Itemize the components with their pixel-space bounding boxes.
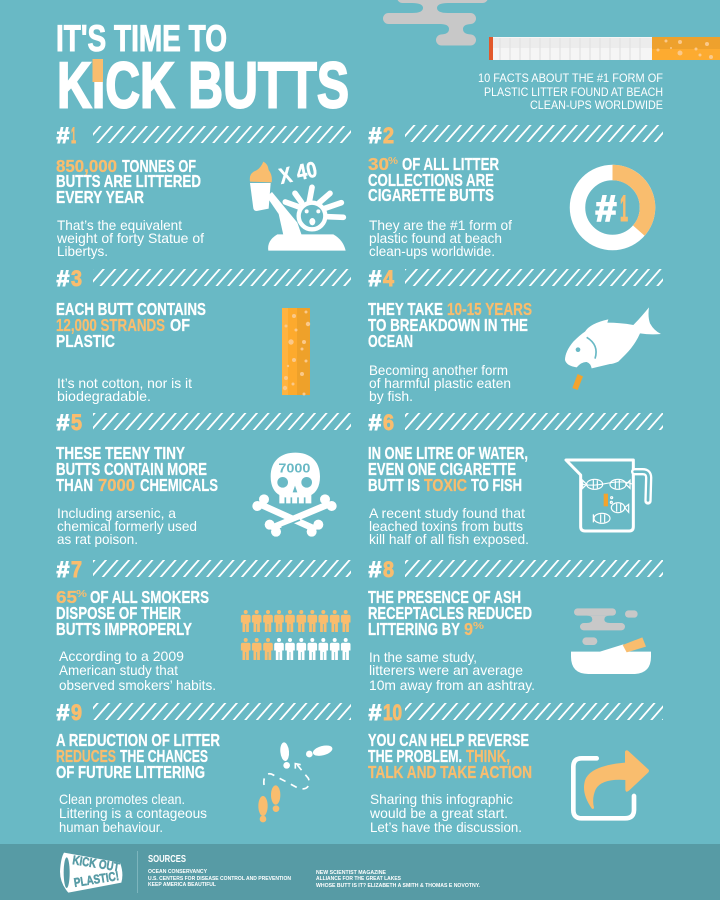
- body 7: According to a 2009: [59, 648, 184, 664]
- panel: fact 4: [368, 266, 663, 404]
- heading 5: THESE TEENY TINY: [56, 443, 185, 463]
- heading 1: EVERY YEAR: [56, 187, 144, 207]
- heading 3: 12,000 STRANDS: [56, 315, 165, 335]
- title: IT'S TIME TO: [56, 18, 227, 59]
- logo: kick out plastic: [60, 853, 122, 893]
- body 4: by fish.: [369, 388, 413, 404]
- body 6: [369, 505, 529, 547]
- label: times forty: X 40: [277, 157, 319, 189]
- body 2: plastic found at beach: [369, 230, 502, 246]
- heading 9: OF FUTURE LITTERING: [56, 762, 205, 782]
- body 5: as rat poison.: [57, 531, 138, 547]
- heading 6: EVEN ONE CIGARETTE: [368, 459, 516, 479]
- number 6: #: [368, 410, 382, 435]
- body 6: kill half of all fish exposed.: [369, 531, 529, 547]
- subtitle: [478, 71, 663, 112]
- heading 3: [56, 299, 206, 351]
- sources: WHOSE BUTT IS IT? ELIZABETH A SMITH & THOMAS E NOVOTNY.: [316, 883, 480, 889]
- heading 1: [56, 156, 201, 207]
- panel: fact 6: [368, 410, 663, 547]
- heading 8: RECEPTACLES REDUCED: [368, 603, 532, 623]
- body 7: observed smokers’ habits.: [59, 677, 216, 693]
- heading 1: 850,000: [56, 156, 117, 176]
- body 1: That’s the equivalent: [57, 217, 182, 233]
- heading 10: THE PROBLEM.: [368, 746, 462, 766]
- heading 1: TONNES OF: [122, 156, 196, 176]
- icon: share arrow: [573, 750, 649, 818]
- heading 6: TOXIC: [424, 475, 467, 495]
- heading 7: DISPOSE OF THEIR: [56, 603, 181, 623]
- number 6: [368, 410, 394, 435]
- heading 10: TALK AND TAKE ACTION: [368, 762, 532, 782]
- heading 3: OF: [170, 315, 190, 335]
- heading 2: COLLECTIONS ARE: [368, 170, 494, 190]
- number 4: #: [368, 266, 382, 291]
- heading 8: LITTERING BY: [368, 619, 460, 639]
- heading 4: 10-15 YEARS: [447, 299, 532, 319]
- body 7: [59, 648, 216, 693]
- body 1: Libertys.: [57, 243, 108, 259]
- subtitle: 10 FACTS ABOUT THE #1 FORM OF: [478, 71, 663, 85]
- heading 4: OCEAN: [368, 331, 413, 351]
- body 5: [57, 505, 197, 547]
- heading 10: [368, 730, 532, 782]
- body 8: [369, 649, 535, 693]
- heading 10: THINK,: [466, 746, 510, 766]
- sources: NEW SCIENTIST MAGAZINE: [316, 870, 386, 876]
- number 2: [368, 123, 394, 148]
- icon: skull and crossbones: [252, 453, 337, 537]
- body 3: [57, 375, 192, 404]
- cigarette: [489, 37, 720, 60]
- body 5: chemical formerly used: [57, 518, 197, 534]
- heading 4: THEY TAKE: [368, 299, 443, 319]
- number 3: [56, 266, 82, 291]
- footer band: [0, 844, 720, 900]
- heading 6: BUTT IS: [368, 475, 420, 495]
- panel: fact 1: [56, 123, 351, 259]
- body 2: [369, 217, 512, 259]
- body 8: In the same study,: [369, 649, 477, 665]
- number 10: [368, 700, 402, 725]
- heading 7: OF ALL SMOKERS: [90, 587, 209, 607]
- number 3: 3: [71, 266, 82, 291]
- heading 2: 30: [368, 154, 389, 174]
- body 6: A recent study found that: [369, 505, 525, 521]
- donut chart: 1: [620, 188, 628, 229]
- body 10: Sharing this infographic: [370, 791, 513, 807]
- number 5: #: [56, 410, 70, 435]
- number 2: #: [368, 123, 382, 148]
- number 1: #: [56, 123, 70, 148]
- heading 6: TO FISH: [471, 475, 522, 495]
- pictogram: people: [241, 610, 351, 660]
- body 10: would be a great start.: [369, 805, 508, 821]
- body 1: weight of forty Statue of: [56, 230, 204, 246]
- icon: fish eating butt: [565, 307, 661, 390]
- body 9: human behaviour.: [59, 819, 163, 835]
- body 9: Littering is a contageous: [59, 805, 207, 821]
- sources: [148, 854, 480, 889]
- panel: fact 1: 1: [71, 123, 76, 148]
- body 2: They are the #1 form of: [369, 217, 512, 233]
- number 9: 9: [71, 700, 82, 725]
- heading 1: BUTTS ARE LITTERED: [56, 171, 201, 191]
- body 4: of harmful plastic eaten: [369, 375, 511, 391]
- panel: fact 3: [56, 266, 351, 404]
- heading 8: [368, 587, 532, 639]
- heading 9: THE CHANCES: [120, 746, 208, 766]
- icon: statue of liberty: [250, 162, 346, 251]
- heading 9: REDUCES: [56, 746, 116, 766]
- heading 4: TO BREAKDOWN IN THE: [368, 315, 528, 335]
- heading 9: [56, 730, 220, 782]
- number 8: #: [368, 557, 382, 582]
- subtitle: CLEAN-UPS WORLDWIDE: [530, 98, 663, 112]
- number 2: 2: [383, 123, 394, 148]
- heading 7: 65: [56, 587, 77, 607]
- icon: cigarette filter: [282, 308, 310, 396]
- body 9: [59, 791, 207, 835]
- number 5: 5: [71, 410, 82, 435]
- number 5: [56, 410, 82, 435]
- number 10: #: [368, 700, 382, 725]
- number 9: #: [56, 700, 70, 725]
- heading 2: OF ALL LITTER: [402, 154, 499, 174]
- heading 6: IN ONE LITRE OF WATER,: [368, 443, 528, 463]
- heading 7: [56, 587, 209, 639]
- sources: OCEAN CONSERVANCY: [148, 869, 207, 875]
- donut chart: [578, 172, 648, 242]
- smoke: [383, 0, 488, 46]
- panel: fact 5: [56, 410, 351, 547]
- number 4: [368, 266, 395, 291]
- panel: fact 10: [368, 700, 663, 835]
- logo: kick out plastic: KICK OUT: [72, 853, 121, 874]
- heading 5: CHEMICALS: [140, 475, 218, 495]
- heading 5: 7000: [98, 475, 135, 495]
- number 10: 10: [383, 700, 402, 725]
- sources: ALLIANCE FOR THE GREAT LAKES: [316, 876, 401, 882]
- number 1: [56, 123, 76, 148]
- heading 4: [368, 299, 532, 351]
- heading 2: CIGARETTE BUTTS: [368, 185, 494, 205]
- number 7: 7: [71, 557, 82, 582]
- heading 8: %: [473, 621, 484, 632]
- sources: KEEP AMERICA BEAUTIFUL: [148, 882, 217, 888]
- number 8: [368, 557, 394, 582]
- heading 10: YOU CAN HELP REVERSE: [368, 730, 529, 750]
- number 4: 4: [383, 266, 395, 291]
- icon: footprints: [258, 742, 334, 822]
- body 8: 10m away from an ashtray.: [369, 677, 535, 693]
- body 1: [56, 217, 204, 259]
- panel: fact 7: [56, 557, 351, 693]
- heading 8: THE PRESENCE OF ASH: [368, 587, 521, 607]
- logo: kick out plastic: PLASTIC!: [73, 869, 120, 890]
- icon: ashtray: [571, 608, 651, 674]
- heading 5: THAN: [56, 475, 93, 495]
- body 5: Including arsenic, a: [57, 505, 176, 521]
- sources: U.S. CENTERS FOR DISEASE CONTROL AND PREVENTION: [148, 876, 291, 882]
- body 6: leached toxins from butts: [369, 518, 523, 534]
- body 3: biodegradable.: [57, 388, 151, 404]
- body 9: Clean promotes clean.: [59, 791, 185, 807]
- heading 7: BUTTS IMPROPERLY: [56, 619, 192, 639]
- title: KICK BUTTS: [57, 48, 349, 122]
- number 7: #: [56, 557, 70, 582]
- number 8: 8: [383, 557, 394, 582]
- heading 7: %: [76, 589, 87, 600]
- heading 6: [368, 443, 528, 495]
- body 3: It’s not cotton, nor is it: [57, 375, 192, 391]
- heading 2: %: [388, 156, 398, 167]
- heading 5: [56, 443, 218, 495]
- body 4: Becoming another form: [369, 362, 508, 378]
- body 4: [369, 362, 511, 404]
- icon: jug of water with fish: [566, 460, 649, 531]
- panel: fact 8: [368, 557, 663, 693]
- panel: fact 9: [56, 700, 351, 835]
- body 2: clean-ups worldwide.: [369, 243, 495, 259]
- heading 2: [368, 154, 499, 205]
- icon: skull and crossbones: 7000: [278, 461, 310, 475]
- heading 5: BUTTS CONTAIN MORE: [56, 459, 207, 479]
- panel: fact 2: [368, 123, 663, 259]
- number 7: [56, 557, 82, 582]
- heading 3: PLASTIC: [56, 331, 115, 351]
- heading 3: EACH BUTT CONTAINS: [56, 299, 206, 319]
- donut chart: #: [596, 188, 616, 229]
- body 7: American study that: [59, 662, 178, 678]
- number 9: [56, 700, 82, 725]
- heading 9: A REDUCTION OF LITTER: [56, 730, 220, 750]
- heading 8: 9: [464, 619, 473, 639]
- body 10: [369, 791, 522, 835]
- subtitle: PLASTIC LITTER FOUND AT BEACH: [484, 85, 663, 99]
- number 3: #: [56, 266, 70, 291]
- body 8: litterers were an average: [369, 662, 523, 678]
- title: [56, 18, 349, 122]
- sources: SOURCES: [148, 854, 186, 865]
- body 10: Let’s have the discussion.: [370, 819, 522, 835]
- number 6: 6: [383, 410, 394, 435]
